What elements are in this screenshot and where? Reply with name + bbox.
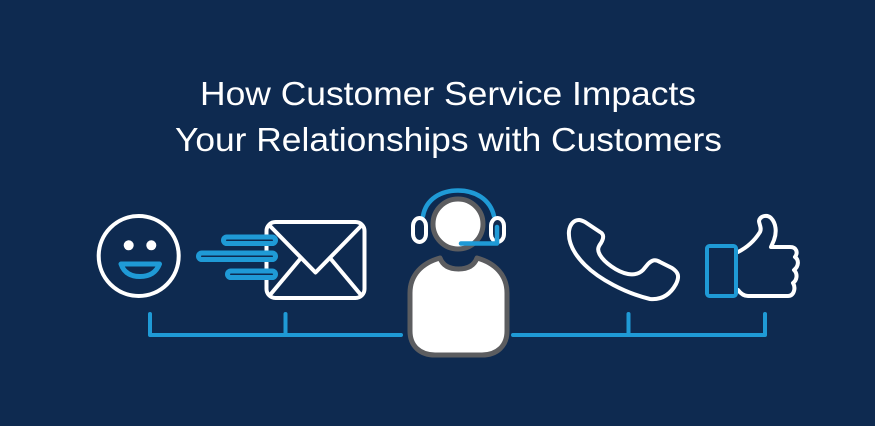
timeline: left connector bbox=[150, 314, 401, 335]
icon: telephone handset bbox=[569, 220, 678, 299]
thumb and fingers bbox=[738, 216, 798, 296]
agent head bbox=[433, 199, 483, 249]
title: How Customer Service Impacts bbox=[200, 75, 696, 112]
icon: thumbs up bbox=[707, 216, 798, 296]
microphone boom bbox=[461, 227, 497, 244]
title: Your Relationships with Customers bbox=[175, 121, 722, 158]
title bbox=[175, 75, 722, 158]
envelope bbox=[266, 222, 364, 298]
speed lines bbox=[198, 237, 276, 278]
icon: smiley face bbox=[99, 216, 179, 296]
agent body bbox=[410, 258, 507, 355]
timeline: right connector bbox=[513, 314, 765, 335]
right ear cup bbox=[491, 218, 504, 242]
icon: customer service agent bbox=[410, 190, 507, 355]
left ear cup bbox=[413, 218, 426, 242]
icon: envelope with speed lines bbox=[198, 222, 364, 298]
headset band bbox=[423, 190, 494, 216]
cuff bbox=[707, 246, 736, 296]
